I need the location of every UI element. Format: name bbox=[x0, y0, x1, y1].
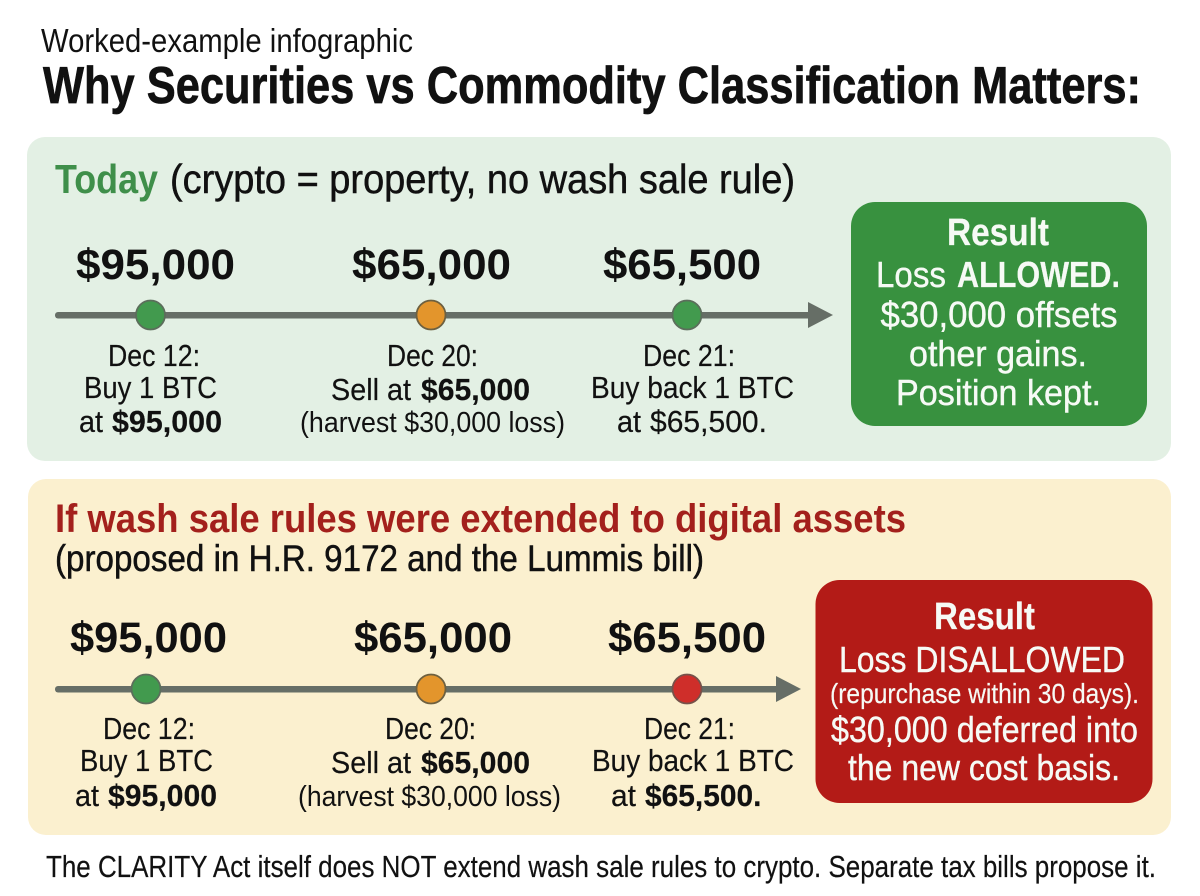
step: Dec 20 today: Dec 20: bbox=[387, 338, 478, 373]
result: disallowed: (repurchase within 30 days). bbox=[830, 678, 1139, 709]
heading: proposed: If wash sale rules were extended to digital assets bbox=[55, 497, 906, 541]
step: Dec 21 today bbox=[591, 338, 794, 439]
step: Dec 21 proposed bbox=[592, 711, 794, 813]
panel: proposed bbox=[28, 479, 1171, 835]
result: allowed: $30,000 offsets bbox=[880, 294, 1118, 335]
step: Dec 12 today: $95,000 bbox=[112, 404, 222, 439]
heading: today: Today bbox=[55, 156, 158, 202]
step: Dec 20 today: Sell at bbox=[331, 372, 411, 407]
step: Dec 21 today: Dec 21: bbox=[643, 338, 735, 373]
result: allowed: Position kept. bbox=[896, 372, 1101, 413]
step: Dec 21 today: $65,500. bbox=[650, 404, 767, 439]
step: Dec 12 proposed bbox=[75, 711, 217, 813]
step: Dec 20 proposed bbox=[298, 711, 561, 813]
prices: today: $65,000 bbox=[352, 241, 511, 289]
result: disallowed: Loss DISALLOWED bbox=[839, 639, 1125, 680]
prices: proposed: $65,000 bbox=[354, 614, 512, 662]
step: Dec 20 proposed: $65,000 bbox=[421, 745, 530, 780]
step: Dec 12 today bbox=[79, 338, 222, 439]
step: Dec 20 today bbox=[300, 338, 565, 439]
step: Dec 20 today: (harvest $30,000 loss) bbox=[300, 407, 565, 439]
step: Dec 21 proposed: at bbox=[611, 778, 636, 813]
prices: proposed: $65,500 bbox=[608, 614, 766, 662]
step: Dec 21 today: at bbox=[617, 404, 641, 439]
heading: proposed: (proposed in H.R. 9172 and the Lummis bill) bbox=[55, 538, 704, 579]
step: Dec 12 proposed: $95,000 bbox=[108, 778, 217, 813]
result: disallowed: Result bbox=[934, 596, 1035, 638]
step: Dec 12 today: Dec 12: bbox=[108, 338, 200, 373]
step: Dec 12 proposed: at bbox=[75, 778, 99, 813]
result: disallowed bbox=[816, 580, 1152, 803]
timeline: proposed bbox=[55, 674, 801, 704]
step: Dec 20 today: $65,000 bbox=[421, 372, 530, 407]
result: allowed: Loss bbox=[876, 254, 946, 295]
subtitle: Worked-example infographic bbox=[41, 22, 413, 59]
step: Dec 20 proposed: Sell at bbox=[331, 745, 411, 780]
result: allowed: Result bbox=[947, 212, 1049, 254]
result: disallowed: the new cost basis. bbox=[848, 747, 1120, 788]
step: Dec 12 today: at bbox=[79, 404, 103, 439]
step: Dec 21 proposed: Dec 21: bbox=[644, 711, 735, 746]
panel: today bbox=[27, 137, 1171, 461]
result: disallowed: $30,000 deferred into bbox=[831, 709, 1138, 750]
step: Dec 20 proposed: (harvest $30,000 loss) bbox=[298, 781, 561, 813]
result: allowed: other gains. bbox=[909, 333, 1087, 374]
heading: proposed bbox=[55, 497, 906, 579]
step: Dec 21 today: Buy back 1 BTC bbox=[591, 370, 794, 405]
heading: today: (crypto = property, no wash sale rule) bbox=[170, 156, 795, 202]
step: Dec 21 proposed: $65,500. bbox=[645, 778, 762, 813]
step: Dec 12 proposed: Dec 12: bbox=[103, 711, 195, 746]
prices: today: $95,000 bbox=[76, 241, 235, 289]
result: allowed: ALLOWED. bbox=[957, 254, 1120, 295]
result: allowed bbox=[851, 202, 1147, 426]
step: Dec 20 proposed: Dec 20: bbox=[385, 711, 476, 746]
prices: today bbox=[76, 241, 761, 289]
step: Dec 21 proposed: Buy back 1 BTC bbox=[592, 743, 794, 778]
step: Dec 12 proposed: Buy 1 BTC bbox=[80, 743, 213, 778]
prices: proposed bbox=[70, 614, 766, 662]
prices: today: $65,500 bbox=[603, 241, 761, 289]
timeline: today bbox=[55, 300, 833, 330]
step: Dec 12 today: Buy 1 BTC bbox=[84, 370, 217, 405]
prices: proposed: $95,000 bbox=[70, 614, 227, 662]
